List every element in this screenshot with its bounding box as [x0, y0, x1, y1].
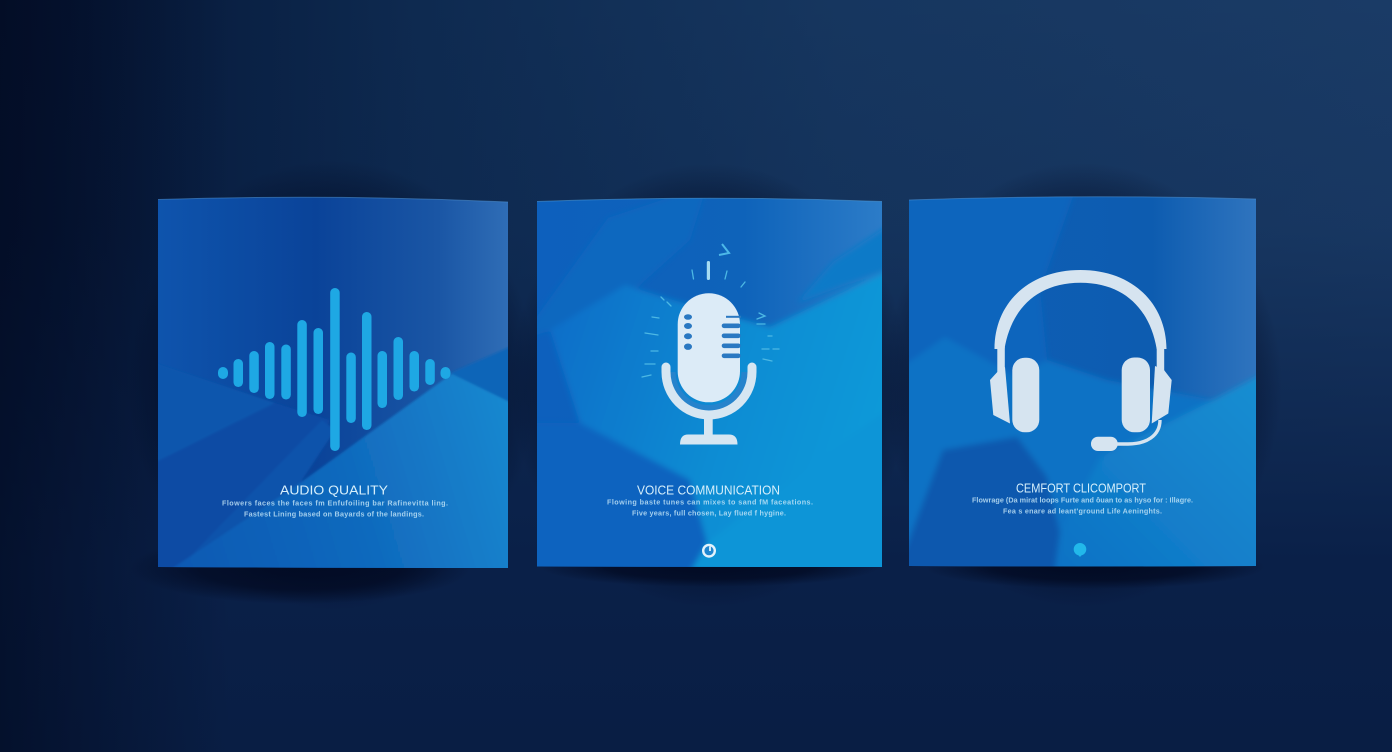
- text block: audio quality description: [222, 498, 448, 518]
- icon: headset: [990, 270, 1172, 451]
- grille: [684, 314, 741, 358]
- text block: audio quality description: Flowers faces the faces fm Enfufoiling bar Rafinevitta ling.: [222, 498, 448, 508]
- panel: comfort: [909, 196, 1256, 566]
- right cup: [1152, 366, 1172, 424]
- text block: comfort description: Fea s enare ad leant'ground Life Aeninghts.: [1003, 506, 1162, 516]
- mic boom: [1112, 420, 1160, 444]
- heading: voice communication: VOICE COMMUNICATION: [637, 484, 780, 498]
- card edge highlight: [909, 197, 1256, 200]
- text block: voice description: Five years, full chosen, Lay flued f hygine.: [632, 508, 786, 518]
- cradle and stand: [666, 367, 752, 415]
- headband: [994, 270, 1166, 349]
- icon: chat drop: [1074, 543, 1086, 557]
- left cup: [990, 367, 1010, 424]
- blue ring: [671, 372, 746, 410]
- heading: comfort: CEMFORT CLICOMPORT: [1016, 482, 1146, 496]
- text block: audio quality description: Fastest Lining based on Bayards of the landings.: [244, 510, 424, 518]
- mic body: [678, 293, 740, 402]
- card background facets: [158, 197, 508, 568]
- text block: comfort description: [972, 496, 1193, 516]
- ear pads: [1012, 358, 1039, 432]
- sound ticks: [642, 270, 779, 377]
- text block: voice description: Flowing baste tunes can mixes to sand fM faceations.: [607, 498, 813, 506]
- card background facets: [537, 198, 882, 567]
- card shadows: [128, 160, 1282, 610]
- music note: [719, 244, 729, 255]
- icon: power badge: [703, 545, 715, 556]
- text block: comfort description: Flowrage (Da mirat loops Furte and ôuan to as hyso for : Illagre.: [972, 496, 1193, 504]
- card edge highlight: [158, 197, 508, 202]
- icon: sound waveform: [218, 288, 450, 451]
- text block: voice description: [607, 498, 813, 518]
- heading: audio quality: AUDIO QUALITY: [280, 484, 389, 498]
- card edge highlight: [537, 198, 882, 202]
- panel: audio quality: [158, 196, 508, 568]
- card background facets: [909, 196, 1256, 566]
- stems: [997, 347, 1005, 373]
- icon: microphone: [642, 244, 779, 444]
- top tick: [707, 261, 710, 280]
- mic capsule: [1091, 437, 1118, 451]
- panel: voice communication: [537, 198, 882, 567]
